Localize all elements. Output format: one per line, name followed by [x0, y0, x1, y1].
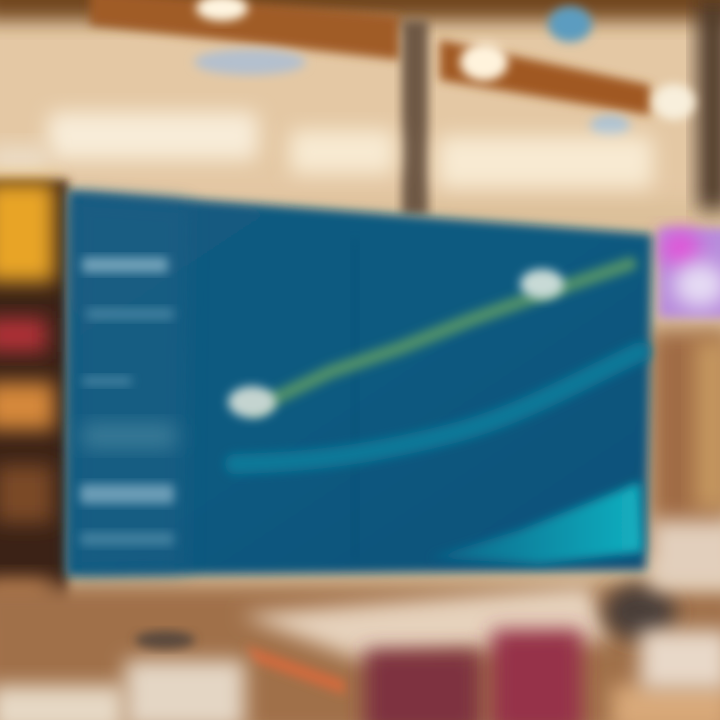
data marker: end: [520, 269, 564, 299]
data marker: start: [228, 386, 276, 418]
panel: chart screen: [66, 190, 652, 576]
line chart: green rising series: [255, 264, 630, 408]
chart gridline: [352, 240, 358, 560]
line chart: teal middle series: [235, 352, 640, 464]
lower table with stacked books: [0, 520, 720, 720]
left shelf of books: [0, 180, 68, 618]
blurred bright signage: [0, 112, 653, 188]
side neon panel: [658, 228, 720, 318]
area chart: bright teal wedge: [430, 482, 643, 564]
ceiling lights: [194, 0, 695, 137]
sidebar column: [72, 196, 188, 572]
